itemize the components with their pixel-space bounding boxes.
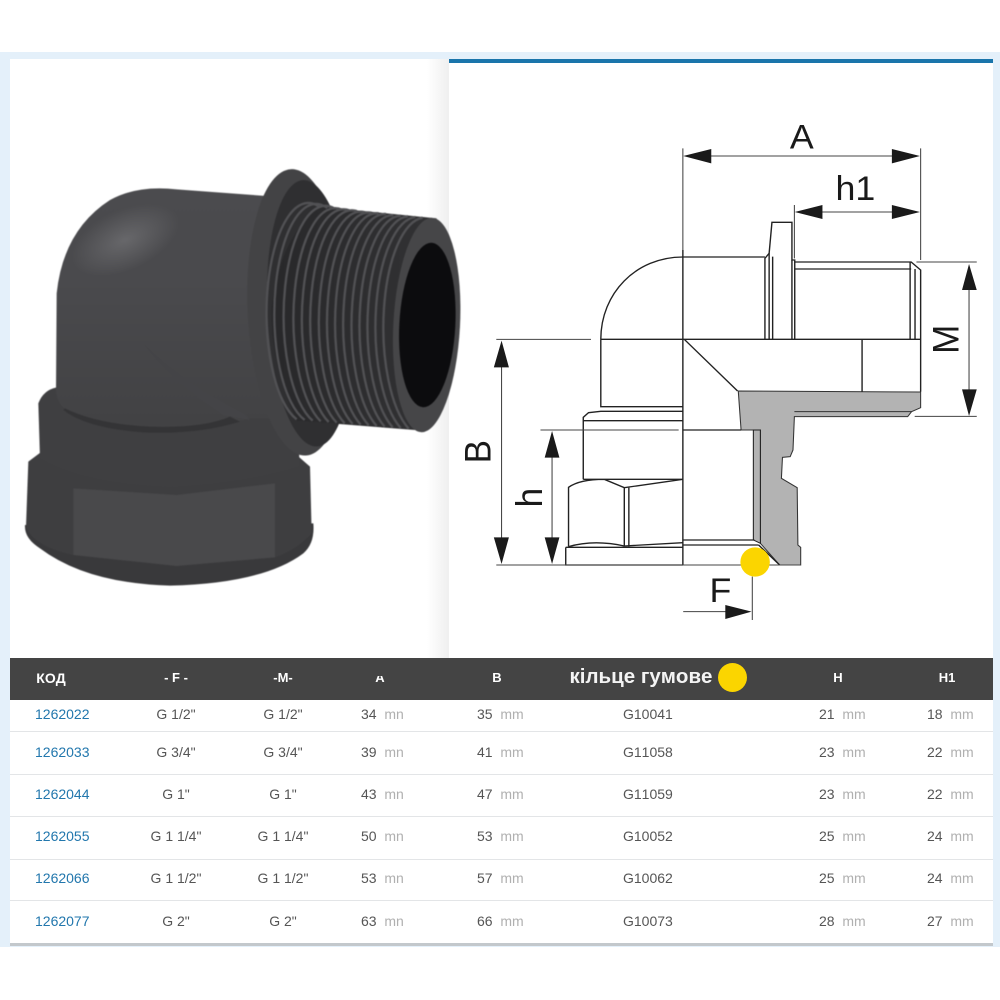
fitting outline: [566, 222, 921, 565]
label A: A: [790, 118, 814, 156]
row 1262077: 1262077: [35, 913, 90, 929]
row 1262066: 53 mn: [361, 870, 404, 886]
label F: F: [709, 572, 731, 610]
panel: technical drawing: [449, 59, 993, 659]
header: M: -M-: [273, 670, 293, 685]
hex nut: [26, 452, 312, 566]
table: [10, 658, 993, 946]
row 1262022: 1262022: [35, 706, 90, 722]
row 1262077: G 2": [162, 913, 190, 929]
header: rubber ring: кільце гумове: [570, 665, 712, 688]
collar: [38, 387, 299, 487]
row 1262044: G 1": [269, 786, 297, 802]
row 1262033: 1262033: [35, 744, 90, 760]
row 1262033: 23 mm: [819, 744, 866, 760]
row 1262044: 43 mn: [361, 786, 404, 802]
row 1262066: 24 mm: [927, 870, 974, 886]
threaded end: [388, 216, 466, 434]
row 1262044: [35, 786, 974, 802]
row 1262044: 1262044: [35, 786, 90, 802]
row 1262033: 22 mm: [927, 744, 974, 760]
seam: [143, 343, 250, 420]
row 1262044: G 1": [162, 786, 190, 802]
elbow body: [56, 188, 275, 427]
row 1262055: 50 mn: [361, 828, 404, 844]
row 1262077: 63 mn: [361, 913, 404, 929]
row 1262044: 22 mm: [927, 786, 974, 802]
row 1262033: [35, 744, 974, 760]
row 1262055: G 1 1/4": [258, 828, 308, 844]
row 1262077: G10073: [623, 913, 673, 929]
row 1262022: G 1/2": [263, 706, 303, 722]
header: code: КОД: [36, 670, 66, 686]
dimension lines: [496, 148, 977, 620]
row 1262022: G10041: [623, 706, 673, 722]
highlight: [61, 189, 189, 291]
flange: [240, 167, 356, 458]
row 1262066: [35, 870, 974, 886]
row 1262044: G11059: [623, 786, 673, 802]
technical drawing: [457, 118, 977, 620]
yellow ring marker: [740, 547, 770, 577]
arrowheads: [494, 149, 977, 619]
label M: M: [925, 325, 967, 354]
row 1262066: G 1 1/2": [151, 870, 201, 886]
row 1262066: 57 mm: [477, 870, 524, 886]
header: F: - F -: [164, 670, 188, 685]
row 1262022: 34 mn: [361, 706, 404, 722]
row 1262033: 39 mn: [361, 744, 404, 760]
row 1262022: [35, 706, 974, 722]
row 1262022: G 1/2": [156, 706, 196, 722]
icon: yellow ring: [718, 663, 747, 692]
row 1262077: 66 mm: [477, 913, 524, 929]
header: H: H: [833, 670, 843, 685]
row 1262055: G10052: [623, 828, 673, 844]
header: A (clipped): A: [375, 670, 385, 685]
row 1262055: [35, 828, 974, 844]
row 1262055: 53 mm: [477, 828, 524, 844]
row 1262055: 24 mm: [927, 828, 974, 844]
row 1262066: 1262066: [35, 870, 90, 886]
table header: [10, 658, 993, 700]
header: H1: H1: [939, 670, 955, 685]
product photo: threaded elbow: [24, 168, 462, 586]
row 1262022: 21 mm: [819, 706, 866, 722]
label h1: h1: [836, 170, 875, 208]
row 1262077: G 2": [269, 913, 297, 929]
row 1262033: G 3/4": [263, 744, 303, 760]
row 1262022: 35 mm: [477, 706, 524, 722]
row 1262066: 25 mm: [819, 870, 866, 886]
row 1262033: G11058: [623, 744, 673, 760]
row 1262077: [35, 913, 974, 929]
thread: [272, 207, 437, 431]
row 1262055: G 1 1/4": [151, 828, 201, 844]
base flange: [25, 523, 314, 586]
row 1262022: 18 mm: [927, 706, 974, 722]
row 1262044: 23 mm: [819, 786, 866, 802]
row 1262066: G 1 1/2": [258, 870, 308, 886]
label B: B: [457, 440, 499, 463]
section cut: [738, 391, 921, 565]
row 1262077: 27 mm: [927, 913, 974, 929]
row 1262033: 41 mm: [477, 744, 524, 760]
header: B: B: [492, 670, 502, 685]
bore: [395, 241, 460, 409]
row 1262055: 1262055: [35, 828, 90, 844]
row 1262044: 47 mm: [477, 786, 524, 802]
panel: product photo: [10, 59, 449, 659]
row 1262077: 28 mm: [819, 913, 866, 929]
row 1262055: 25 mm: [819, 828, 866, 844]
row 1262066: G10062: [623, 870, 673, 886]
label h: h: [508, 488, 550, 507]
row 1262033: G 3/4": [156, 744, 196, 760]
